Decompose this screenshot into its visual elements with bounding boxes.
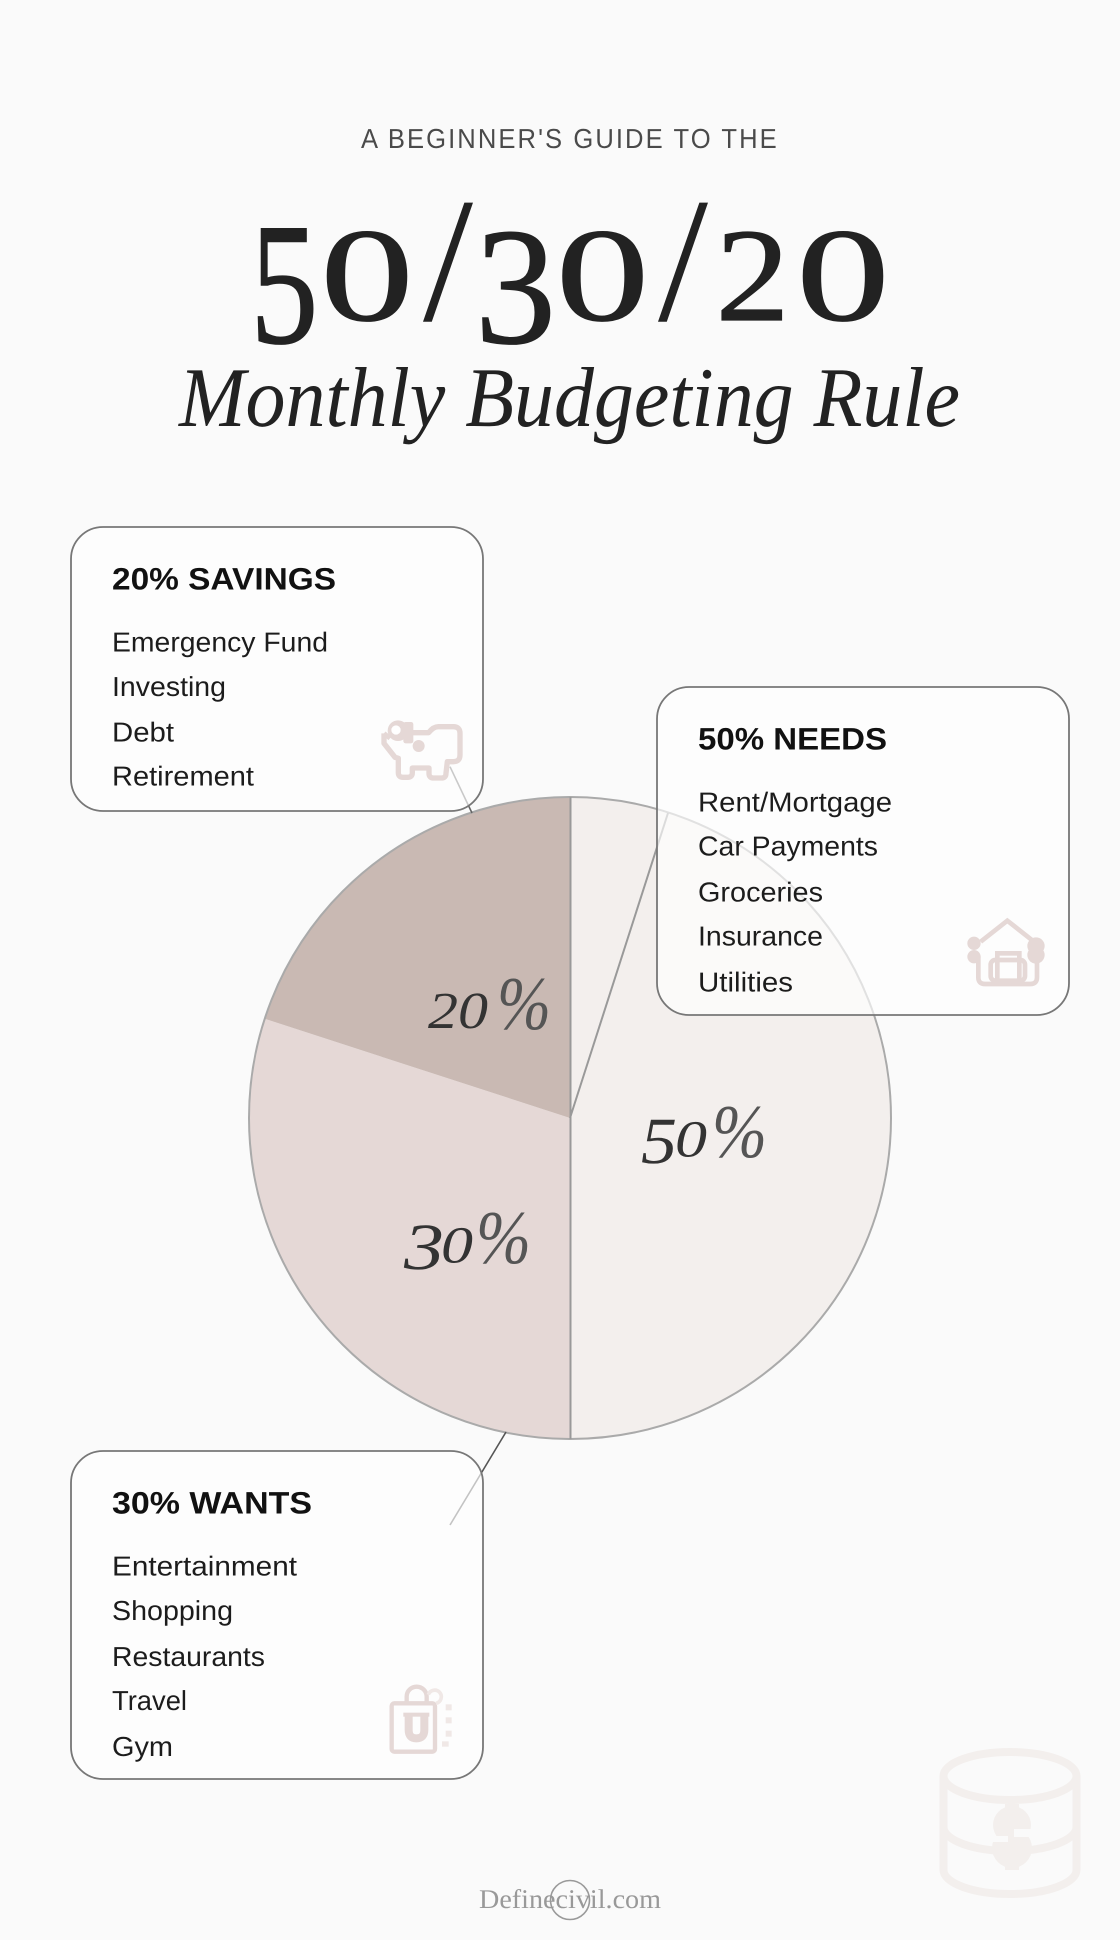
icon: piggy bank	[384, 720, 460, 778]
list: wants: Travel	[112, 1685, 187, 1716]
list: needs: Groceries	[698, 877, 823, 908]
list: wants	[112, 1551, 297, 1762]
slice: 50% needs	[570, 797, 891, 1439]
title: 50/30/20: 2	[716, 201, 790, 349]
pie label: 50%: 5	[641, 1105, 677, 1178]
list: wants: Restaurants	[112, 1641, 265, 1672]
list: savings: Retirement	[112, 761, 254, 792]
pie label: 50%: 0	[675, 1111, 707, 1168]
list: needs: Utilities	[698, 967, 793, 998]
list: wants: Entertainment	[112, 1551, 297, 1582]
vertical divider	[570, 797, 572, 1439]
pie label: 30%: 0	[441, 1218, 473, 1275]
subtitle: A BEGINNER'S GUIDE TO THE	[361, 123, 777, 154]
connector: savings	[450, 767, 472, 813]
panel: 20% savings	[71, 527, 483, 811]
pie label: 30%: %	[476, 1196, 531, 1280]
list: savings: Debt	[112, 717, 174, 748]
list: savings: Investing	[112, 671, 226, 702]
title: Monthly Budgeting Rule: Monthly Budgeting Rule	[178, 351, 960, 445]
title: 50/30/20: /	[423, 161, 474, 359]
list: needs: Car Payments	[698, 831, 878, 862]
heading: wants: 30% WANTS	[112, 1485, 312, 1520]
panel: 30% wants	[71, 1451, 483, 1779]
list: needs: Rent/Mortgage	[698, 787, 892, 818]
icon: house	[967, 921, 1045, 984]
icon: money barrel	[944, 1752, 1076, 1894]
needs slice inner line	[570, 813, 668, 1118]
list: savings: Emergency Fund	[112, 627, 328, 658]
slice: 30% wants	[249, 1019, 570, 1439]
pie label: 30%: 3	[403, 1211, 444, 1284]
title: 50/30/20: 0	[556, 201, 649, 349]
title: 50/30/20: 3	[475, 195, 556, 380]
list: savings	[112, 627, 328, 792]
title: 50/30/20: 0	[796, 201, 890, 349]
slice: 20% savings	[265, 797, 570, 1118]
panel: 50% needs	[657, 687, 1069, 1015]
list: needs: Insurance	[698, 921, 823, 952]
pie label: 20%: %	[497, 962, 551, 1046]
list: needs	[698, 787, 892, 998]
connector: wants	[450, 1432, 506, 1525]
pie label: 50%: %	[712, 1090, 767, 1174]
heading: savings: 20% SAVINGS	[112, 561, 336, 596]
pie chart	[249, 797, 891, 1439]
watermark: Definecivil.com: Definecivil.com	[479, 1884, 661, 1914]
list: wants: Gym	[112, 1731, 173, 1762]
title: 50/30/20: /	[658, 161, 709, 359]
pie outline	[249, 797, 891, 1439]
title: 50/30/20: 0	[320, 201, 414, 349]
pie label: 20%: 20	[428, 983, 488, 1040]
icon: shopping bag	[392, 1687, 452, 1752]
title: 50/30/20: 5	[250, 188, 318, 381]
heading: needs: 50% NEEDS	[698, 721, 887, 756]
list: wants: Shopping	[112, 1595, 233, 1626]
